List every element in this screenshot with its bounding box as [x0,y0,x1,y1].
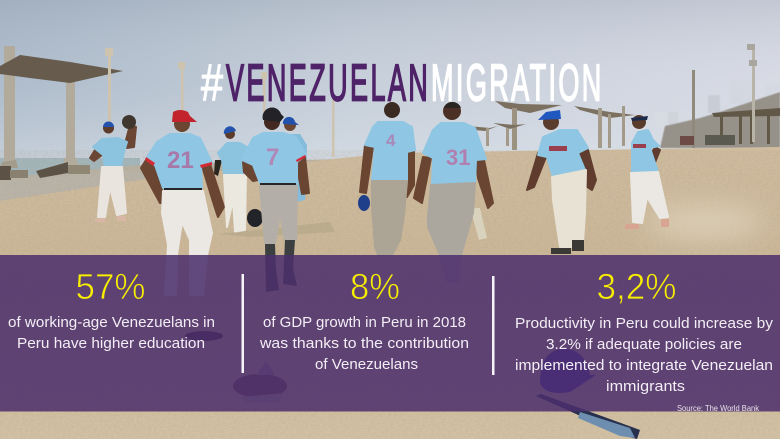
title [201,53,604,112]
small glove [185,331,223,341]
player on the right [625,115,669,229]
number 3,2%: 3,2% [596,266,676,307]
stat: 57% [8,266,215,352]
benches [0,162,90,180]
sky [0,0,780,165]
description 3,2%: immigrants [606,379,685,395]
distant hillside and city [655,80,780,148]
source note: Source: The World Bank [677,403,760,413]
lamp posts [105,48,334,157]
player behind [283,117,307,202]
player in blue cap [527,110,596,254]
player number 21 [141,110,224,295]
divider [242,274,244,373]
description 57% [8,315,215,352]
divider [492,276,494,375]
sand texture [0,150,780,439]
helmet on the ground [540,349,596,393]
description 57%: of working-age Venezuelans in [8,315,215,331]
stat: 3,2% [515,266,774,395]
player number 31 [414,102,493,282]
player number 31: 31 [446,145,470,170]
utility poles [692,44,757,148]
description 8%: of Venezuelans [315,357,418,373]
player number 4 [358,102,415,255]
number 57%: 57% [76,266,146,307]
left pergola [0,46,123,168]
bat on the ground [536,394,640,439]
sand ground [0,147,780,439]
title word: Venezuelan: VENEZUELAN [226,53,430,112]
description 8%: was thanks to the contribution [259,336,469,352]
description 3,2%: Productivity in Peru could increase by [515,316,774,332]
player number 21: 21 [167,147,194,174]
description 3,2%: 3.2% if adequate policies are [546,337,742,353]
promenade wall [0,150,780,201]
player number 4: 4 [386,131,396,150]
description 3,2% [515,316,774,395]
purple statistics band [0,255,780,412]
dust cloud [645,206,765,238]
player number 7 [242,108,309,292]
number 8%: 8% [350,266,400,307]
right pergolas [468,101,635,150]
description 8% [259,315,469,373]
parked vehicles [680,135,735,145]
player number 7: 7 [266,144,279,171]
glove on the ground [233,361,287,403]
right shelter [712,108,780,144]
bag on the ground [218,209,335,237]
stat: 8% [259,266,469,373]
player number 12 [214,126,247,232]
description 8%: of GDP growth in Peru in 2018 [263,315,466,331]
description 57%: Peru have higher education [17,336,205,352]
title word: Migration: MIGRATION [431,53,604,112]
player with glove [90,115,136,222]
description 3,2%: implemented to integrate Venezuelan [515,358,773,374]
hashtag: # [201,53,223,112]
sea [0,158,140,178]
